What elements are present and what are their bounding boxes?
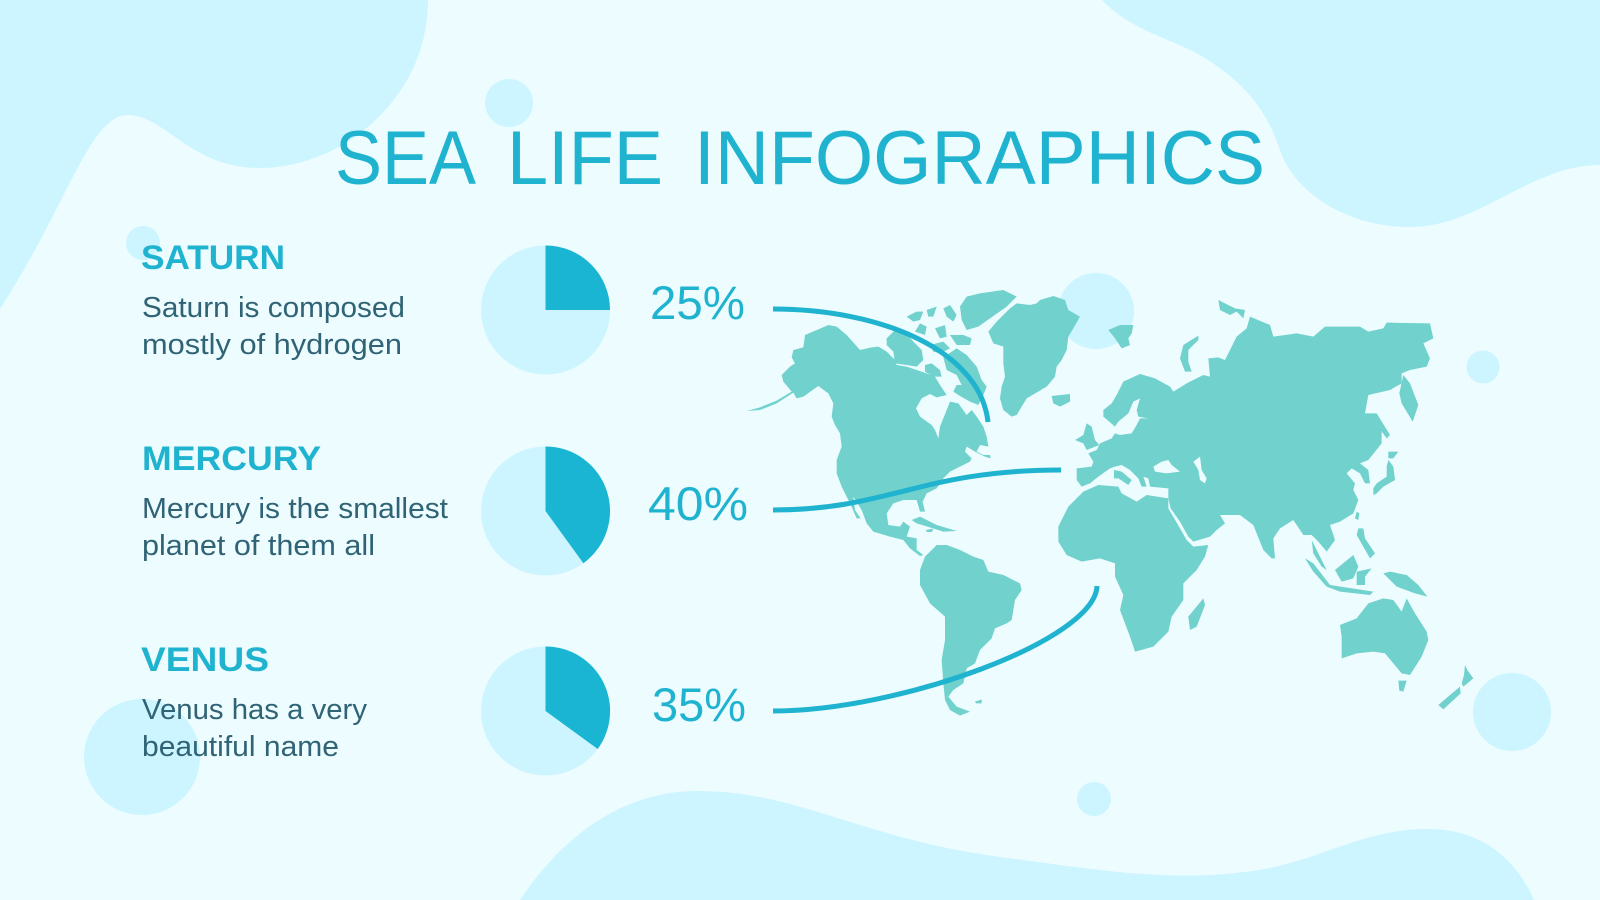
bubble: behind Saturn heading	[126, 226, 160, 260]
text block: Saturn description	[142, 292, 405, 361]
blob: top left	[0, 0, 428, 309]
text block: Mercury description	[142, 493, 448, 562]
arrow: 25% to North America	[773, 309, 988, 422]
chart: Saturn pie 25%	[481, 246, 610, 374]
title: LIFE	[507, 116, 663, 201]
number: 40%: 40%	[648, 477, 748, 530]
bubble: right large	[1473, 673, 1551, 751]
chart: world map	[747, 290, 1473, 716]
blob: bottom	[520, 791, 1534, 900]
text block: Saturn description: Saturn is composed	[142, 292, 405, 324]
text block: Mercury description: Mercury is the smallest	[142, 493, 448, 525]
bubble: bottom left large	[84, 699, 200, 815]
arrow: 35% to Africa	[773, 586, 1097, 711]
text block: Venus description: Venus has a very	[142, 694, 367, 726]
bubble: bottom small	[1077, 782, 1111, 816]
heading: Saturn: SATURN	[141, 239, 285, 277]
number: 25%: 25%	[650, 276, 745, 329]
text block: Venus description	[142, 694, 367, 763]
title: SEA	[335, 116, 476, 201]
bubble: near title	[485, 79, 533, 127]
bubble: behind map north	[1058, 273, 1134, 349]
panel: Mercury	[142, 440, 748, 576]
heading: Venus: VENUS	[141, 641, 269, 679]
panel: Venus	[141, 641, 746, 776]
title	[335, 116, 1265, 201]
title: INFOGRAPHICS	[694, 116, 1265, 201]
chart: Mercury pie 40%	[481, 446, 610, 576]
chart: Venus pie 35%	[481, 646, 610, 776]
panel: Saturn	[141, 239, 745, 374]
heading: Mercury: MERCURY	[142, 440, 321, 478]
connector lines	[773, 309, 1097, 711]
map: Eurasia, Africa and Oceania	[1058, 300, 1473, 709]
text block: Saturn description: mostly of hydrogen	[142, 329, 402, 361]
blob: top right	[1102, 0, 1600, 227]
bubble: right small	[1466, 350, 1500, 384]
arrow: 40% to Europe	[773, 470, 1061, 510]
map: Americas and Greenland	[747, 290, 1133, 716]
number: 35%: 35%	[652, 678, 746, 731]
text block: Mercury description: planet of them all	[142, 530, 375, 562]
text block: Venus description: beautiful name	[142, 731, 339, 763]
